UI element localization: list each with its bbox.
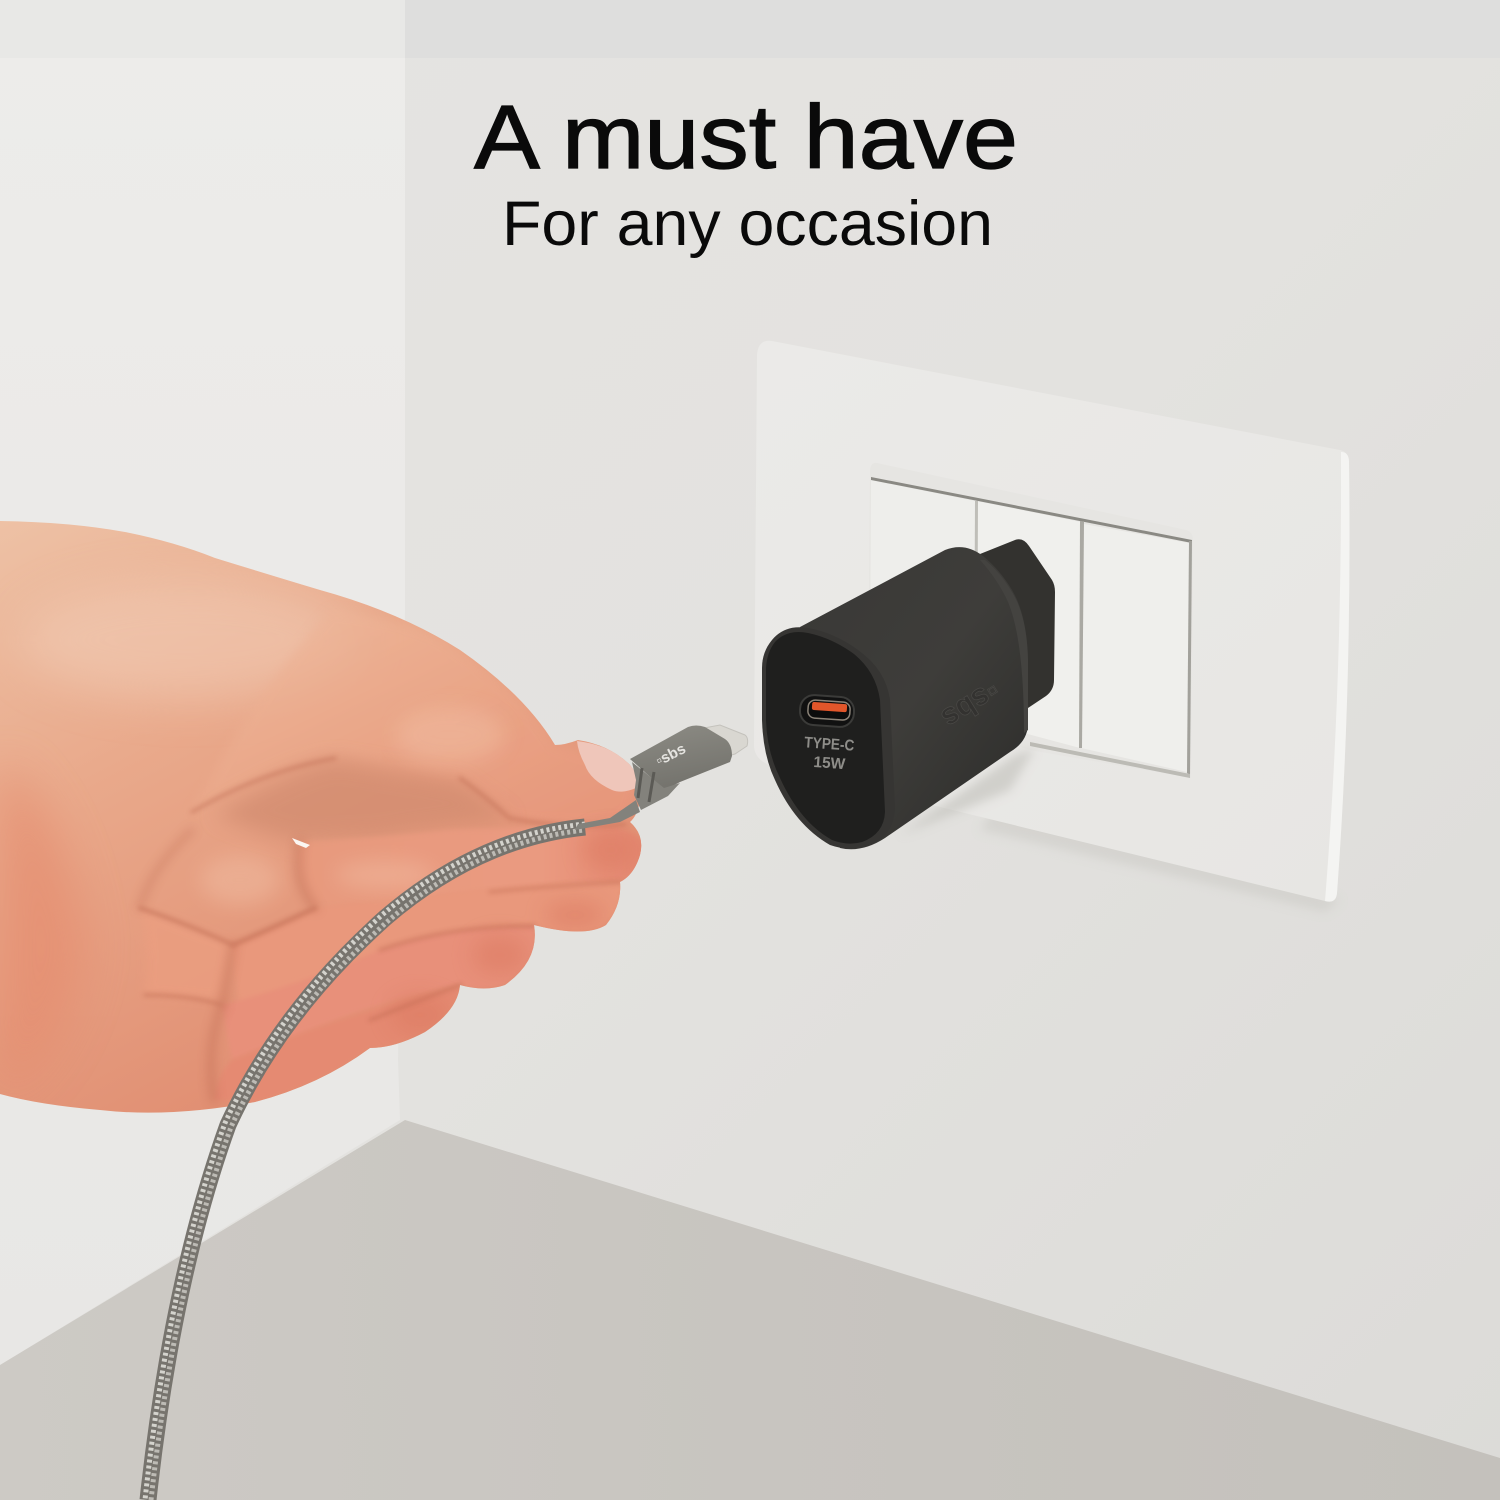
heading: A must have — [474, 88, 1018, 188]
port label: 15W — [813, 754, 846, 773]
palm and back of hand — [0, 500, 660, 1130]
strain relief — [575, 762, 680, 830]
connector logo: ▫sbs — [653, 740, 689, 770]
fingers — [250, 831, 642, 1103]
charger front face — [762, 627, 895, 849]
finger creases — [140, 758, 625, 1100]
redness at wrist edge — [0, 783, 78, 1042]
embossed logo: ▫sbs — [935, 674, 1006, 735]
USB-C connector — [575, 725, 748, 830]
braided cable — [145, 824, 585, 1500]
highlight on back of hand — [20, 580, 360, 700]
socket recess — [868, 463, 1193, 778]
wall socket plate — [754, 341, 1350, 912]
metal tip — [704, 725, 748, 758]
charger shadow — [900, 748, 1035, 835]
thumb nail — [577, 741, 637, 792]
little finger — [250, 990, 460, 1103]
socket key modules — [870, 477, 1192, 778]
ring finger — [460, 930, 535, 988]
knuckle area — [140, 908, 233, 1000]
subheading: For any occasion — [502, 189, 993, 259]
gap highlight between fingers — [292, 838, 310, 848]
hand — [0, 500, 660, 1130]
knuckle lights — [200, 707, 505, 905]
middle finger — [534, 884, 620, 932]
plug neck — [975, 539, 1055, 720]
port label — [804, 734, 855, 773]
USB-C port — [799, 694, 855, 728]
port label: TYPE-C — [804, 734, 855, 755]
thumb — [296, 633, 555, 745]
connector housing — [630, 726, 732, 790]
title — [474, 88, 1018, 259]
shaded web of palm — [228, 761, 491, 839]
charger body — [800, 547, 1028, 849]
shelf surface — [0, 1120, 1500, 1500]
charger — [762, 539, 1055, 849]
index finger — [333, 831, 642, 884]
finger tip reds — [407, 836, 626, 1032]
